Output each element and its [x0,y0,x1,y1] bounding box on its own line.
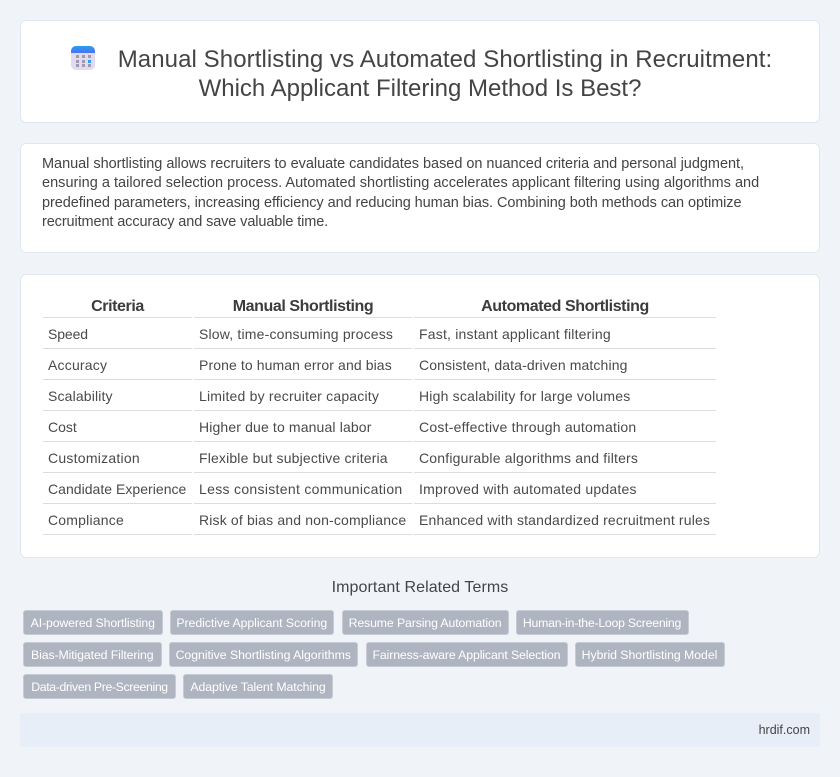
title: Manual Shortlisting vs Automated Shortlisting in Recruitment: [118,46,772,72]
title: Which Applicant Filtering Method Is Best? [199,74,641,102]
text block: introduction: recruitment accuracy and save valuable time. [42,214,328,230]
text block: introduction [42,156,759,230]
related terms tags: Fairness-aware Applicant Selection [372,648,560,662]
comparison table: Customization [48,450,140,466]
related terms tags: Cognitive Shortlisting Algorithms [176,648,351,662]
panel: comparison table [20,274,820,558]
text block: introduction: Manual shortlisting allows recruiters to evaluate candidates based on nuanced criteria and personal judgment, [42,156,744,172]
comparison table: Cost-effective through automation [419,419,636,435]
comparison table: Enhanced with standardized recruitment rules [419,512,710,528]
comparison table: Cost [48,419,77,435]
footer source: hrdif.com [759,723,810,737]
related terms tags: Adaptive Talent Matching [190,680,326,694]
footer bar [20,713,820,746]
comparison table: Flexible but subjective criteria [199,450,388,466]
comparison table: Configurable algorithms and filters [419,450,638,466]
comparison table: Consistent, data-driven matching [419,357,628,373]
comparison table: Risk of bias and non-compliance [199,512,406,528]
comparison table: Manual Shortlisting [233,298,373,315]
comparison table: Limited by recruiter capacity [199,388,379,404]
comparison table: High scalability for large volumes [419,388,630,404]
comparison table: Scalability [48,388,113,404]
comparison table: Speed [48,326,88,342]
comparison table: Compliance [48,512,124,528]
comparison table: Less consistent communication [199,481,403,497]
comparison table: Higher due to manual labor [199,419,372,435]
related terms tags: Human-in-the-Loop Screening [523,616,681,630]
panel: introduction [20,143,820,253]
comparison table: Slow, time-consuming process [199,326,393,342]
related terms tags: Data-driven Pre-Screening [31,680,168,694]
icon: calendar [71,46,95,70]
comparison table: Prone to human error and bias [199,357,392,373]
text block: introduction: ensuring a tailored selection process. Automated shortlisting accelerates applicant filtering using algorithms and [42,175,759,191]
related terms tags: Predictive Applicant Scoring [176,616,327,630]
heading: related terms: Important Related Terms [332,579,508,596]
title [118,46,772,102]
comparison table: Candidate Experience [48,481,186,497]
comparison table: Criteria [91,298,144,315]
text block: introduction: predefined parameters, increasing efficiency and reducing human bias. Combining both methods can optimize [42,195,742,211]
panel: header [20,20,820,123]
related terms tags: Hybrid Shortlisting Model [582,648,717,662]
related terms tags: Bias-Mitigated Filtering [31,648,153,662]
comparison table: Fast, instant applicant filtering [419,326,611,342]
comparison table: Improved with automated updates [419,481,637,497]
related terms tags: Resume Parsing Automation [349,616,501,630]
comparison table: Automated Shortlisting [481,298,649,315]
comparison table: Accuracy [48,357,107,373]
related terms tags: AI-powered Shortlisting [31,616,155,630]
